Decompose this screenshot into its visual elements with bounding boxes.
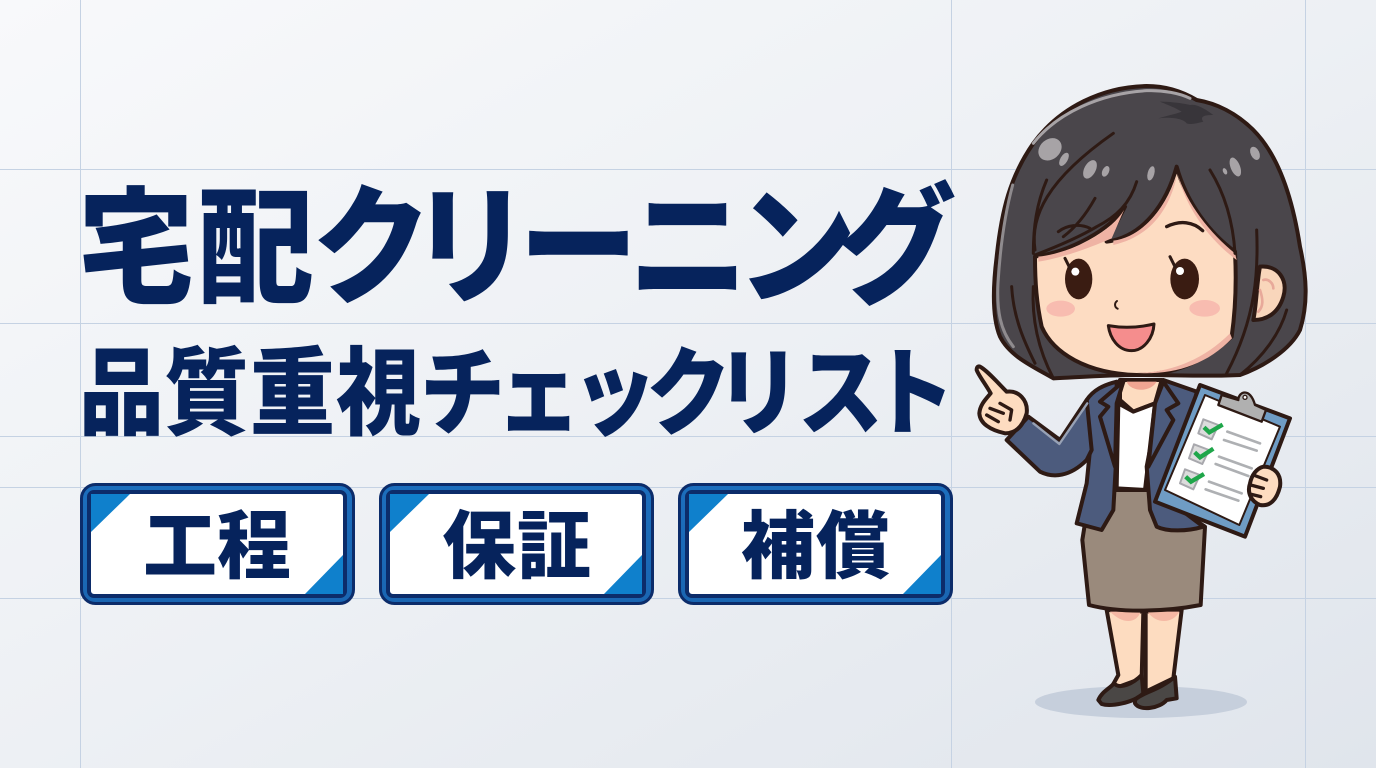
- tag: 工程: 工程: [143, 505, 291, 588]
- tag: 補償: [680, 484, 952, 604]
- body: [977, 366, 1290, 708]
- tag: 工程: [82, 484, 354, 604]
- tag: 保証: [380, 484, 652, 604]
- title: sub heading: 品質重視チェックリスト: [79, 341, 955, 448]
- title: main heading: クリーニング: [312, 176, 956, 321]
- head: [994, 86, 1306, 378]
- tag: 保証: 保証: [442, 505, 591, 588]
- illustration: businesswoman with clipboard: [977, 86, 1306, 718]
- title: main heading: 宅配: [78, 178, 314, 320]
- tag: 補償: 補償: [741, 505, 890, 588]
- ground shadow: [1035, 686, 1247, 718]
